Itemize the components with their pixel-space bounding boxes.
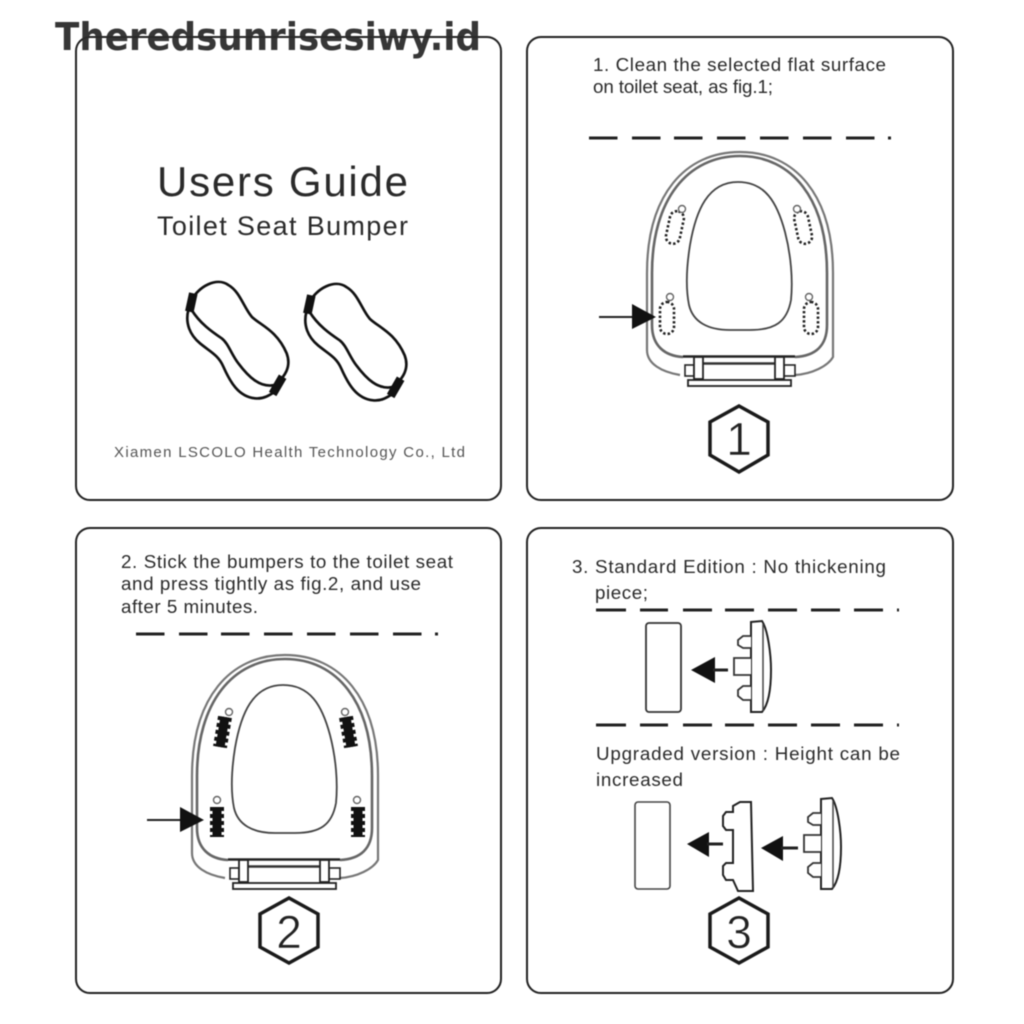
badge: 1: 1: [726, 413, 752, 465]
standard edition text: piece;: [595, 582, 648, 603]
panel: cover: [76, 37, 501, 500]
badge: 3: [710, 898, 768, 963]
step 2 instructions: after 5 minutes.: [121, 596, 258, 617]
standard edition text: [572, 556, 886, 603]
step 2 instructions: 2. Stick the bumpers to the toilet seat: [121, 551, 454, 572]
badge: 2: [260, 898, 318, 963]
step 1 instructions: 1. Clean the selected flat surface: [593, 54, 886, 75]
figure: toilet seat: [647, 152, 833, 386]
panel: step 2: [76, 528, 501, 993]
badge: 2: 2: [276, 906, 302, 958]
standard assembly diagram: [646, 621, 771, 712]
standard edition text: 3. Standard Edition : No thickening: [572, 556, 886, 577]
icon: right bumper: [305, 284, 406, 400]
heading: Users Guide: Users Guide: [157, 158, 408, 205]
arrow: [147, 807, 204, 832]
step 2 instructions: and press tightly as fig.2, and use: [121, 573, 421, 594]
bumper positions: dotted: [660, 206, 818, 334]
bumpers attached: [214, 708, 360, 837]
step 1 instructions: on toilet seat, as fig.1;: [593, 76, 773, 97]
upgraded assembly diagram: [635, 798, 841, 891]
subheading: Toilet Seat Bumper: Toilet Seat Bumper: [157, 211, 408, 241]
upgraded version text: [596, 743, 900, 790]
figure: toilet seat with bumpers: [192, 655, 378, 889]
step 1 instructions: [593, 54, 886, 97]
arrow: [599, 304, 656, 329]
upgraded version text: increased: [596, 769, 683, 790]
watermark: Theredsunrisesiwy.id: [55, 15, 481, 59]
panel: step 3: [527, 528, 953, 993]
badge: 1: [710, 406, 768, 472]
icon: left bumper: [187, 282, 288, 398]
step 2 instructions: [121, 551, 454, 617]
upgraded version text: Upgraded version : Height can be: [596, 743, 900, 764]
panel: step 1: [527, 37, 953, 500]
manufacturer line: Xiamen LSCOLO Health Technology Co., Ltd: [114, 444, 465, 461]
badge: 3: 3: [726, 906, 752, 958]
